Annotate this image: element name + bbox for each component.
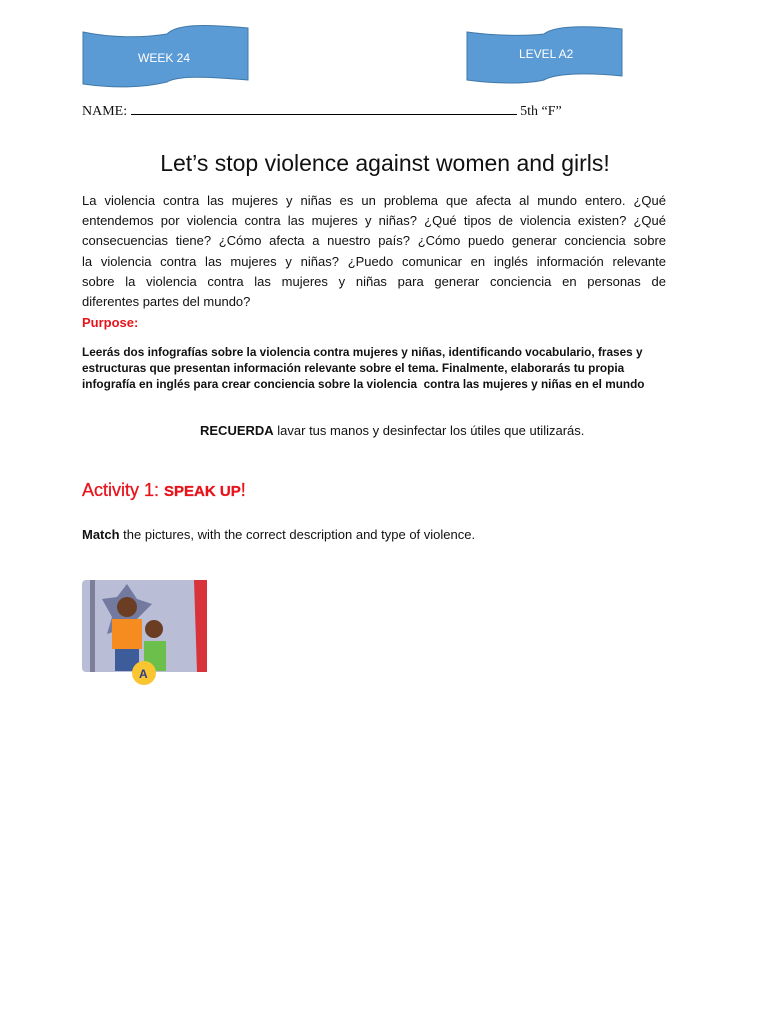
banner: week 24: WEEK 24 xyxy=(138,51,190,65)
purpose text: Leerás dos infografías sobre la violencia contra mujeres y niñas, identificando vocabulario, frases y estructuras que presentan información relevante sobre el tema. Finalmente, elaborarás tu propia infografía en inglés para crear conciencia sobre la violencia contra las mujeres y niñas en el mundo xyxy=(82,345,645,391)
intro paragraph: consecuencias tiene? ¿Cómo afecta a nuestro país? ¿Cómo puedo generar conciencia sobre xyxy=(82,233,666,248)
instruction: Match the pictures, with the correct description and type of violence. xyxy=(82,527,475,542)
title: Let’s stop violence against women and girls! xyxy=(160,150,610,176)
intro paragraph: sobre la violencia contra las mujeres y niñas para generar conciencia en personas de xyxy=(82,274,666,289)
intro paragraph: diferentes partes del mundo? xyxy=(82,294,250,309)
banner: week 24 xyxy=(82,25,248,88)
intro paragraph: la violencia contra las mujeres y niñas? ¿Puedo comunicar en inglés información relevante xyxy=(82,254,666,269)
reminder: RECUERDA lavar tus manos y desinfectar los útiles que utilizarás. xyxy=(200,423,584,438)
intro paragraph: entendemos por violencia contra las mujeres y niñas? ¿Qué tipos de violencia existen? ¿Qué xyxy=(82,213,666,228)
intro paragraph: La violencia contra las mujeres y niñas es un problema que afecta al mundo entero. ¿Qué xyxy=(82,193,666,208)
name line: NAME: 5th “F” xyxy=(82,104,562,119)
banner: level A2: LEVEL A2 xyxy=(519,47,574,61)
intro paragraph xyxy=(82,193,666,309)
activity heading: Activity 1: SPEAK UP! xyxy=(82,480,246,500)
picture A xyxy=(82,580,207,685)
picture A: A xyxy=(139,667,148,681)
banner: level A2 xyxy=(466,26,622,84)
purpose heading: Purpose: xyxy=(82,315,138,330)
